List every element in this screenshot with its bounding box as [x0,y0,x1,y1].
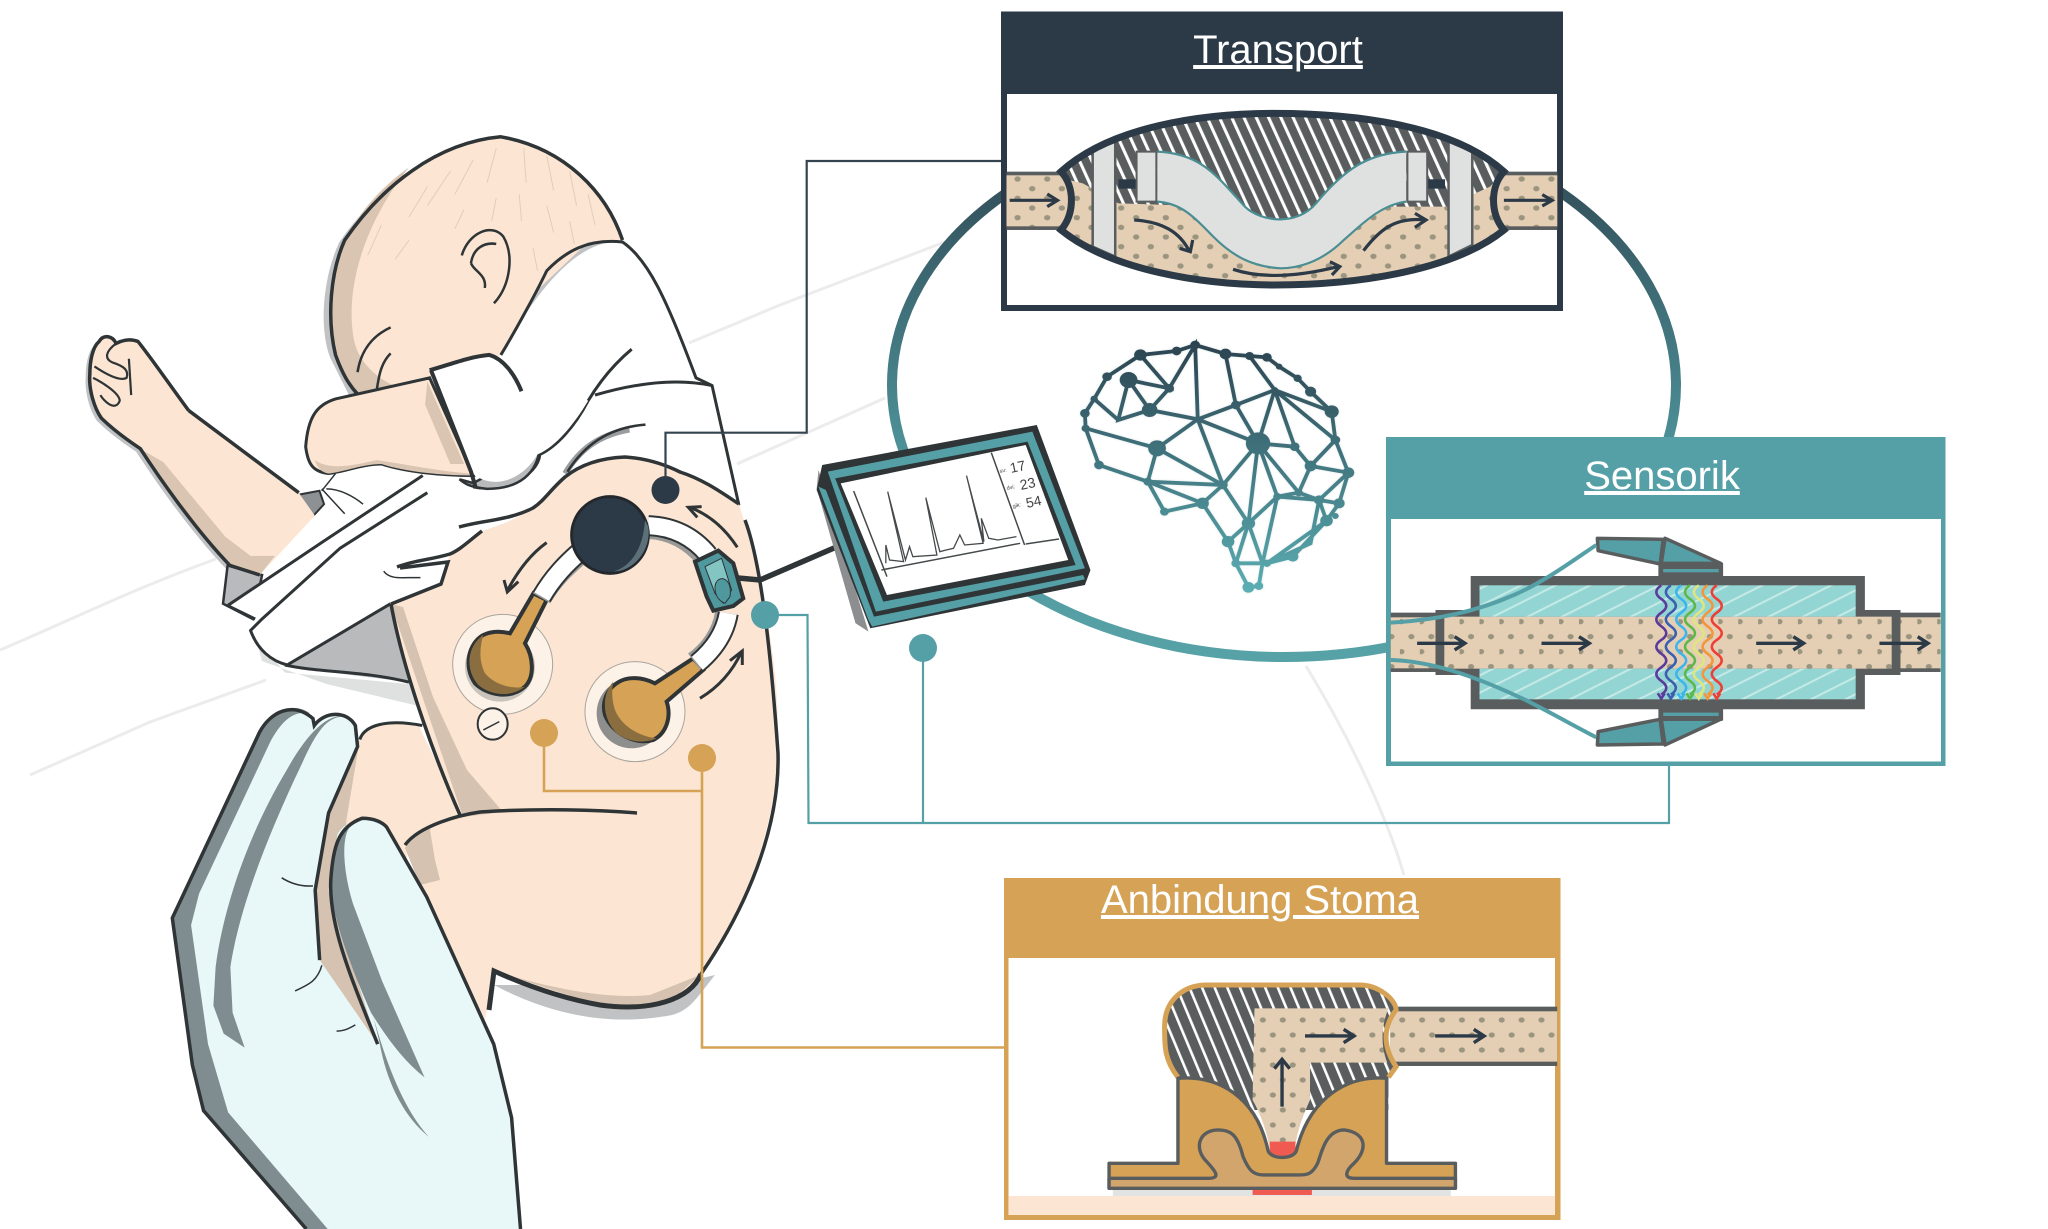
baby shirt [228,241,739,707]
chamber walls [1093,142,1472,257]
heading: Sensorik: Sensorik [1584,454,1741,498]
fibre leads [1391,545,1596,737]
outlet tube [1390,1007,1557,1066]
sensor cross-section [1391,538,1941,745]
bottom sensor [1597,709,1721,745]
baby head [324,137,623,403]
scar mark [478,708,508,740]
monitor device [817,425,1090,632]
belly lower contour [489,971,701,1010]
stoma device on abdomen [453,497,743,762]
brain network icon [1080,341,1354,593]
sensor cable [738,545,841,580]
oval loop connecting the modules [892,113,1676,657]
connector: sensorik [751,601,1669,823]
panel: Anbindung Stoma [1004,878,1560,1220]
baby belly [391,457,778,1020]
heading: Anbindung Stoma: Anbindung Stoma [1101,878,1420,922]
panel: Transport [1001,12,1563,311]
flow arrows [1274,1029,1484,1107]
monitor readings: 17 [1008,457,1027,476]
stoma connector cross-section [1008,985,1557,1215]
monitor readings [999,457,1043,511]
marker dot: stoma left [530,719,558,747]
inlet and outlet tubes [1006,172,1557,230]
marker dot: transport [652,476,680,504]
illustration: baby [86,137,778,1229]
flow channel [1253,1008,1388,1150]
marker dot: sensorik on abdomen [751,601,779,629]
monitor readings: dvi: [1006,484,1016,492]
baby leg and foot [86,337,324,619]
pump disc [572,497,649,573]
flow arrows [1010,194,1552,275]
baby upper leg behind the glove [315,723,462,1044]
baby arm and sleeve [306,355,588,489]
spectrum waves [1656,585,1722,699]
panel: Sensorik [1386,437,1946,766]
stoma red tip [1270,1142,1295,1157]
heading: Transport: Transport [1193,28,1363,72]
marker dot: sensorik near monitor [909,634,937,662]
flow arrows [1417,637,1928,650]
belly cast shadow [494,975,715,1020]
monitor readings: gik: [1012,502,1022,510]
connector: transport [652,161,1003,504]
monitor chart [854,453,1059,577]
monitor readings: sv: [999,468,1008,475]
housing [1061,113,1504,285]
flow arrows on abdomen [504,507,742,698]
right stoma plate [585,658,703,762]
tubes and housing [1391,576,1941,709]
membrane [1137,152,1427,268]
marker dot: stoma right [688,744,716,772]
belly outline [391,457,778,974]
connector housing [1165,985,1396,1110]
skin [1008,1189,1555,1215]
glove hand [172,708,521,1229]
monitor readings: 54 [1024,492,1043,511]
top sensor [1597,538,1721,577]
pump cross-section [1006,113,1557,285]
adhesive flange [1109,1078,1455,1188]
sensor clip [695,551,743,611]
monitor readings: 23 [1018,474,1037,493]
tubing [542,526,728,663]
belly shading [391,604,700,1010]
connector: stoma [530,719,1004,1048]
left stoma plate [453,593,553,714]
